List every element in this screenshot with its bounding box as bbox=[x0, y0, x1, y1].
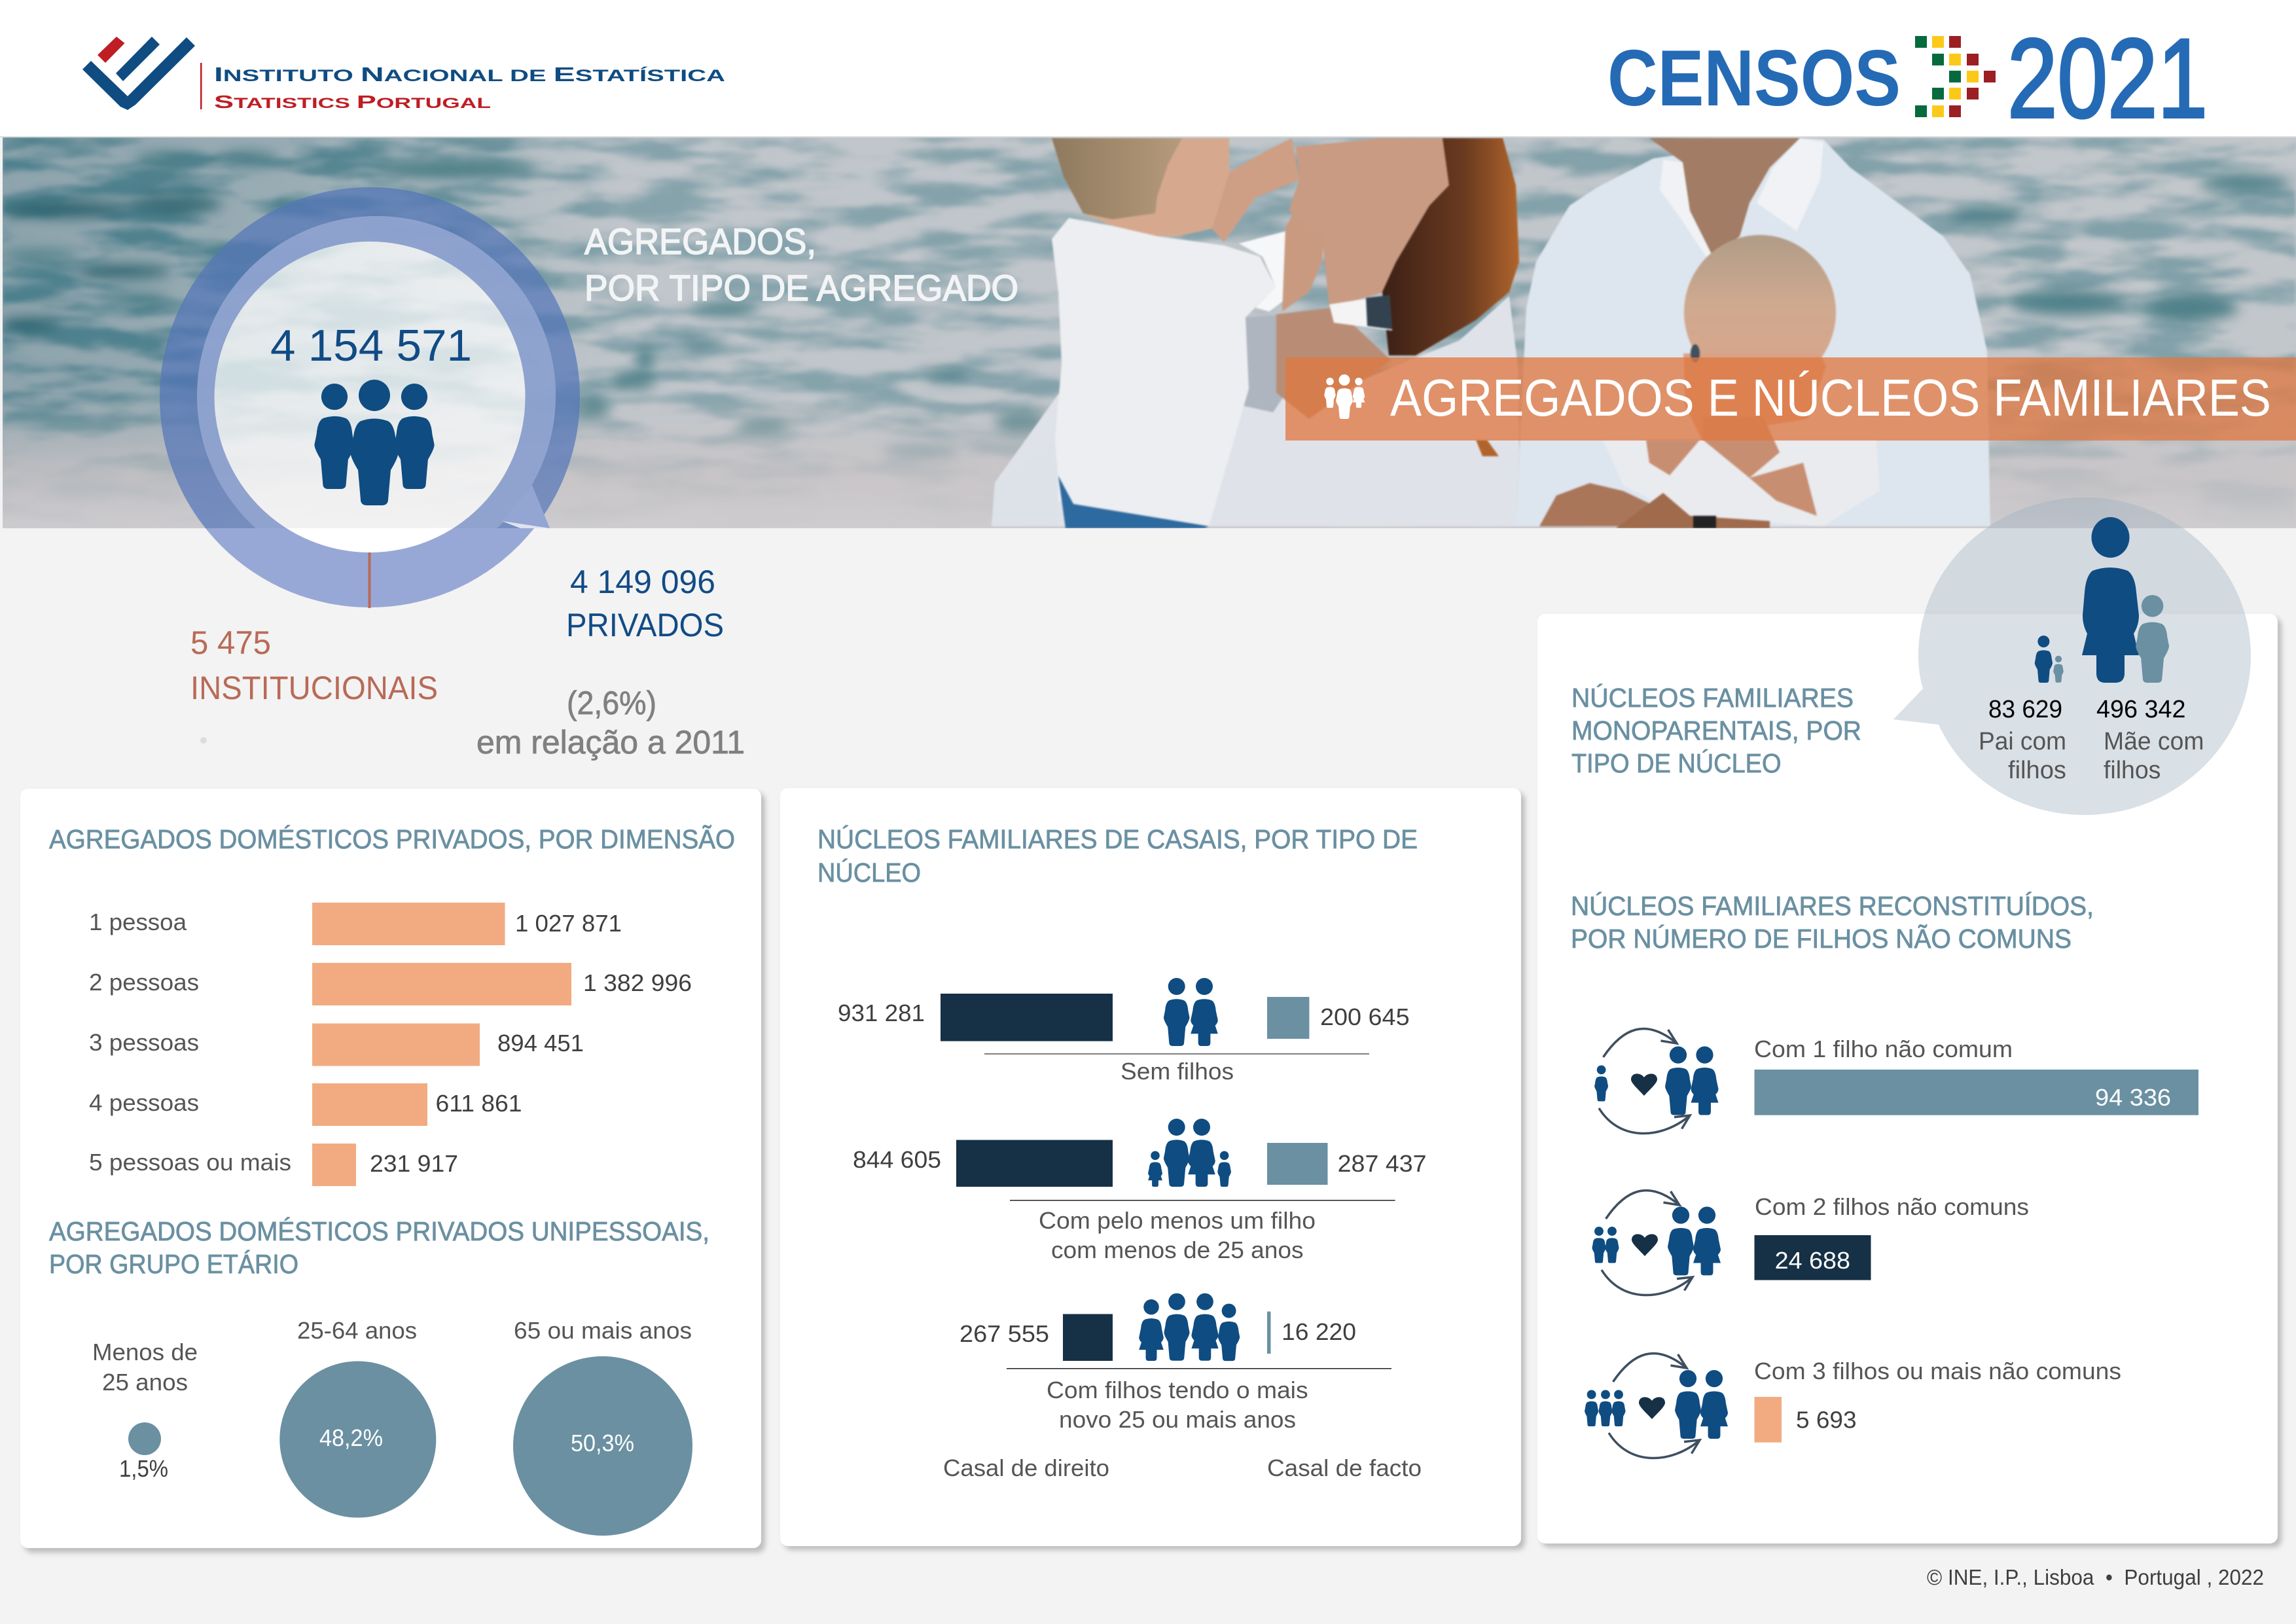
mother hands and face bbox=[1289, 138, 1449, 308]
logo: Instituto Nacional de Estatística: S TATISTICS P ORTUGAL bbox=[214, 92, 491, 112]
bubble chart: age groups: Menos de bbox=[92, 1339, 198, 1365]
mother grey top bbox=[1244, 314, 1286, 412]
row: com filhos tendo o mais novo 25 ou mais anos: novo 25 ou mais anos bbox=[1059, 1406, 1296, 1433]
row: com 3 filhos ou mais não comuns: Com 3 filhos ou mais não comuns bbox=[1754, 1358, 2121, 1384]
panel: agregados domésticos privados bbox=[20, 789, 765, 1553]
row: com 1 filho não comum bbox=[1594, 1029, 2198, 1134]
section heading: Agregados, por tipo de agregado bbox=[584, 221, 1018, 308]
total value: 4 154 571 bbox=[270, 321, 472, 370]
row: com 2 filhos não comuns: Com 2 filhos não comuns bbox=[1755, 1193, 2029, 1220]
callout: privados: PRIVADOS bbox=[566, 607, 724, 643]
callout: variation from 2011 bbox=[476, 685, 745, 761]
title ribbon: Agregados e Núcleos Familiares bbox=[1285, 357, 2296, 441]
bubble chart: age groups: 48,2% bbox=[319, 1424, 383, 1451]
heading: casais: NÚCLEO bbox=[817, 857, 921, 888]
bubble chart: age groups: 25 anos bbox=[102, 1369, 188, 1396]
callout: variation from 2011: (2,6%) bbox=[567, 685, 656, 721]
row: com 2 filhos não comuns bbox=[1592, 1191, 2029, 1295]
row: com pelo menos um filho com menos de 25 anos: com menos de 25 anos bbox=[1051, 1236, 1304, 1263]
mother with children value: 496 342 bbox=[2096, 696, 2186, 723]
bubble chart: age groups: 25-64 anos bbox=[297, 1317, 417, 1344]
row: sem filhos: 200 645 bbox=[1320, 1003, 1410, 1030]
speech bubble: monoparental nuclei bbox=[1893, 497, 2251, 815]
bubble chart: age groups: 1,5% bbox=[119, 1455, 168, 1482]
logo: Censos 2021 bbox=[1607, 16, 2208, 141]
heading: reconstituídos: POR NÚMERO DE FILHOS NÃO COMUNS bbox=[1571, 924, 2072, 954]
watch bbox=[1329, 295, 1392, 331]
boy arm bbox=[1212, 138, 1299, 242]
boy head bbox=[1052, 138, 1229, 236]
legend: casal de direito and casal de facto bbox=[943, 1454, 1422, 1481]
legend: casal de direito and casal de facto: Casal de facto bbox=[1267, 1454, 1422, 1481]
boy shirt bbox=[1052, 218, 1276, 526]
father shirt bbox=[1516, 138, 1990, 526]
heading: monoparentais: TIPO DE NÚCLEO bbox=[1571, 748, 1782, 778]
section heading: Agregados, por tipo de agregado: POR TIPO DE AGREGADO bbox=[584, 267, 1018, 308]
row: com filhos tendo o mais novo 25 ou mais anos bbox=[960, 1293, 1391, 1433]
logo: Instituto Nacional de Estatística: INSTITUTO N ACIONAL DE E STATÍSTICA bbox=[214, 63, 725, 86]
institutional share line bbox=[368, 552, 370, 608]
bar chart: households by size: 3 pessoas bbox=[89, 1029, 199, 1056]
heading: reconstituídos: NÚCLEOS FAMILIARES RECONSTITUÍDOS, bbox=[1571, 891, 2094, 921]
panel: total households donut bbox=[160, 187, 580, 608]
logo: Censos 2021: CENSOS bbox=[1607, 33, 1901, 122]
heading: monoparentais: MONOPARENTAIS, POR bbox=[1571, 715, 1861, 746]
logo: Instituto Nacional de Estatística bbox=[82, 37, 725, 112]
banner photo: family on the beach bbox=[0, 137, 2296, 528]
icon: couple with one child bbox=[1594, 1029, 1719, 1134]
father with children value: Pai com bbox=[1979, 728, 2066, 755]
icon: household people bbox=[1324, 374, 1365, 419]
mother chest bbox=[1276, 308, 1391, 419]
header bar bbox=[0, 0, 2296, 141]
father with children value: 83 629 bbox=[1988, 696, 2062, 723]
mother back and shirt bbox=[992, 296, 1519, 526]
heading: casais: NÚCLEOS FAMILIARES DE CASAIS, POR TIPO DE bbox=[817, 824, 1418, 854]
heading: monoparentais bbox=[1571, 683, 1861, 778]
row: sem filhos bbox=[838, 978, 1410, 1085]
icon: mother with child bbox=[2082, 517, 2169, 683]
row: com 3 filhos ou mais não comuns bbox=[1585, 1354, 2121, 1458]
row: sem filhos: 931 281 bbox=[838, 1000, 925, 1026]
icon: couple with two children bbox=[1592, 1191, 1721, 1295]
callout: institucionais bbox=[190, 624, 438, 706]
logo: Censos 2021: 2021 bbox=[2007, 16, 2208, 141]
heading: reconstituídos bbox=[1571, 891, 2094, 954]
father with children value: filhos bbox=[2008, 757, 2066, 784]
row: com pelo menos um filho com menos de 25 anos: 844 605 bbox=[853, 1146, 941, 1173]
bar chart: households by size: 1 pessoa bbox=[89, 909, 187, 935]
heading: unipessoais: AGREGADOS DOMÉSTICOS PRIVADOS UNIPESSOAIS, bbox=[49, 1216, 709, 1246]
father with children value bbox=[1979, 696, 2066, 784]
bubble chart: age groups: 50,3% bbox=[571, 1430, 634, 1456]
heading: por dimensão: AGREGADOS DOMÉSTICOS PRIVADOS, POR DIMENSÃO bbox=[49, 824, 735, 854]
heading: unipessoais bbox=[49, 1216, 709, 1279]
row: com filhos tendo o mais novo 25 ou mais anos: 267 555 bbox=[960, 1320, 1049, 1347]
callout: privados: 4 149 096 bbox=[570, 564, 715, 600]
row: com 1 filho não comum: 94 336 bbox=[2095, 1084, 2171, 1111]
bar chart: households by size bbox=[89, 903, 692, 1186]
row: com filhos tendo o mais novo 25 ou mais anos: 16 220 bbox=[1282, 1318, 1356, 1345]
bubble chart: age groups: 65 ou mais anos bbox=[514, 1317, 692, 1344]
mother with children value bbox=[2096, 696, 2204, 784]
photo figures bbox=[992, 138, 1990, 528]
bubble chart: age groups bbox=[92, 1317, 692, 1536]
heading: unipessoais: POR GRUPO ETÁRIO bbox=[49, 1249, 298, 1279]
bar chart: households by size: 5 pessoas ou mais bbox=[89, 1149, 291, 1176]
mother with children value: filhos bbox=[2104, 757, 2161, 784]
row: com 2 filhos não comuns: 24 688 bbox=[1775, 1247, 1850, 1274]
decorative small dot bbox=[200, 737, 207, 744]
callout: institucionais: 5 475 bbox=[190, 624, 271, 661]
section heading: Agregados, por tipo de agregado: AGREGADOS, bbox=[584, 221, 816, 262]
panel: núcleos familiares de casais bbox=[780, 788, 1525, 1550]
bar chart: households by size: 231 917 bbox=[370, 1150, 458, 1177]
mother with children value: Mãe com bbox=[2104, 728, 2204, 755]
bar chart: households by size: 611 861 bbox=[436, 1090, 522, 1117]
row: com 1 filho não comum: Com 1 filho não comum bbox=[1754, 1036, 2013, 1062]
legend: casal de direito and casal de facto: Casal de direito bbox=[943, 1454, 1109, 1481]
bar chart: households by size: 1 027 871 bbox=[515, 910, 622, 937]
bar chart: households by size: 894 451 bbox=[497, 1030, 584, 1056]
panel: núcleos monoparentais e reconstituídos bbox=[1537, 614, 2282, 1547]
row: sem filhos: Sem filhos bbox=[1121, 1058, 1234, 1085]
callout: privados bbox=[566, 564, 724, 643]
heading: monoparentais: NÚCLEOS FAMILIARES bbox=[1571, 683, 1854, 713]
callout: variation from 2011: em relação a 2011 bbox=[476, 724, 745, 761]
row: com filhos tendo o mais novo 25 ou mais anos: Com filhos tendo o mais bbox=[1047, 1377, 1308, 1403]
baby bbox=[1603, 440, 1880, 526]
icon: three people bbox=[314, 380, 435, 505]
bar chart: households by size: 4 pessoas bbox=[89, 1089, 199, 1116]
bar chart: households by size: 1 382 996 bbox=[583, 969, 692, 996]
footer credit: © INE, I.P., Lisboa • Portugal , 2022 bbox=[1927, 1565, 2264, 1589]
bar chart: households by size: 2 pessoas bbox=[89, 969, 199, 996]
heading: casais bbox=[817, 824, 1418, 888]
icon: father with child bbox=[2035, 636, 2064, 683]
icon: couple with three children bbox=[1585, 1354, 1728, 1458]
row: com pelo menos um filho com menos de 25 anos bbox=[853, 1119, 1427, 1263]
row: com pelo menos um filho com menos de 25 anos: Com pelo menos um filho bbox=[1039, 1207, 1316, 1234]
callout: institucionais: INSTITUCIONAIS bbox=[190, 670, 438, 706]
row: com pelo menos um filho com menos de 25 anos: 287 437 bbox=[1338, 1150, 1427, 1177]
row: com 3 filhos ou mais não comuns: 5 693 bbox=[1796, 1407, 1856, 1434]
